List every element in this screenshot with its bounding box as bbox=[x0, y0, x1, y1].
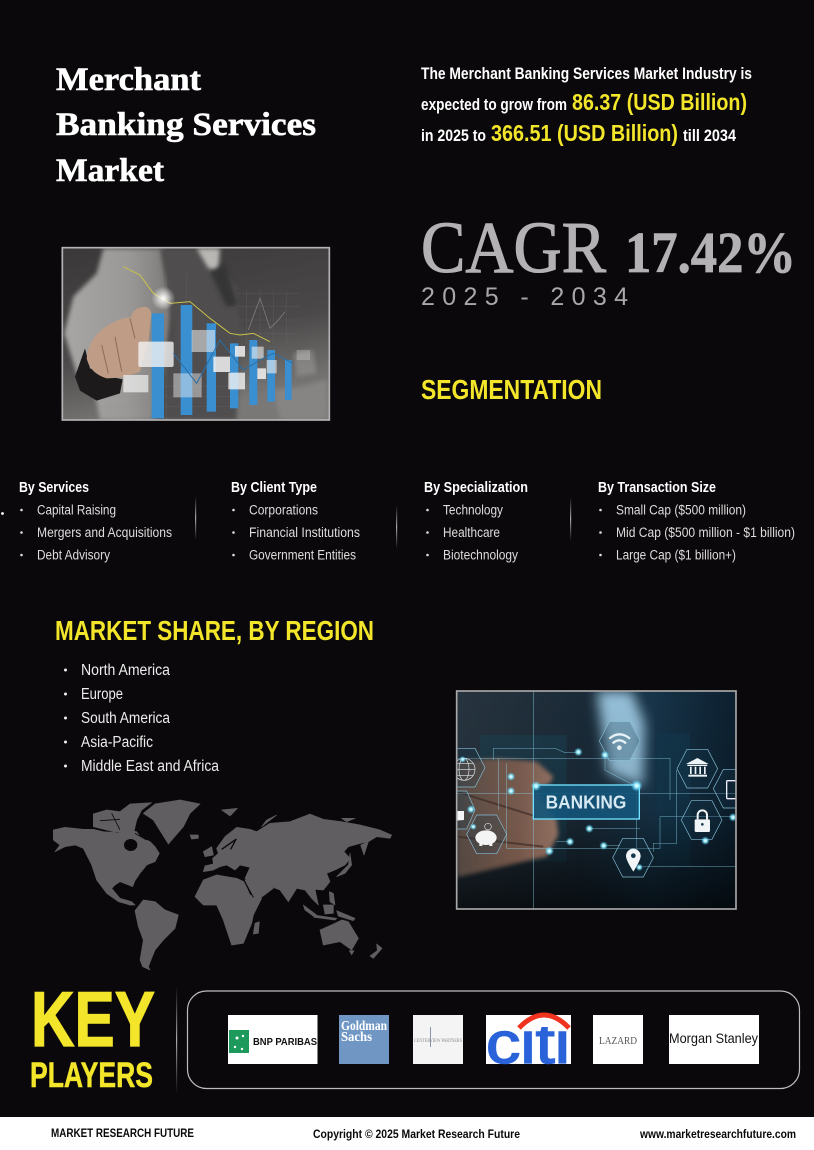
title: Market bbox=[56, 153, 164, 189]
segment: by specialization: Biotechnology bbox=[443, 548, 518, 562]
market growth statement: 366.51 (USD Billion) bbox=[491, 120, 678, 146]
logo: Lazard: LAZARD bbox=[599, 1036, 637, 1047]
region list: Europe bbox=[81, 686, 123, 703]
segment: by services bbox=[19, 479, 172, 562]
region list: South America bbox=[81, 710, 170, 727]
segment: by services: Debt Advisory bbox=[37, 548, 110, 562]
logo: BNP Paribas: BNP PARIBAS bbox=[253, 1036, 317, 1048]
heading: key players: KEY bbox=[31, 975, 155, 1063]
region list: Asia-Pacific bbox=[81, 734, 153, 751]
CAGR figure: CAGR bbox=[421, 207, 606, 288]
segment: by services: By Services bbox=[19, 479, 89, 496]
segment: by transaction size bbox=[598, 479, 795, 562]
footer bbox=[0, 1117, 814, 1150]
hand bbox=[457, 758, 558, 877]
market growth statement: in 2025 to bbox=[421, 127, 486, 145]
CAGR figure: 17.42% bbox=[625, 220, 796, 285]
hand bbox=[87, 307, 151, 378]
grid bbox=[164, 274, 300, 419]
logo: BNP Paribas bbox=[228, 1015, 318, 1064]
panel: key player logos bbox=[188, 991, 800, 1088]
photo: banking technology: BANKING bbox=[546, 792, 626, 813]
heading: market share by region: MARKET SHARE, BY REGION bbox=[55, 615, 374, 646]
logo: Centerview Partners: CENTERVIEW PARTNERS bbox=[414, 1039, 462, 1044]
segment: by transaction size: Small Cap ($500 million) bbox=[616, 502, 746, 518]
icon: wifi bbox=[609, 734, 630, 743]
region list: North America bbox=[81, 662, 170, 679]
icon: piggy bank bbox=[475, 830, 497, 845]
title bbox=[56, 62, 316, 189]
title: Banking Services bbox=[56, 107, 316, 143]
logo: Goldman Sachs: Goldman bbox=[341, 1019, 387, 1034]
market growth statement: expected to grow from bbox=[421, 96, 567, 114]
photo: banking technology bbox=[453, 691, 738, 909]
hexagons bbox=[457, 722, 736, 877]
icon: globe bbox=[458, 758, 476, 781]
region list bbox=[64, 662, 219, 775]
footer: Copyright © 2025 Market Research Future bbox=[313, 1127, 520, 1141]
logo: Goldman Sachs: Sachs bbox=[341, 1030, 372, 1045]
bars bbox=[152, 305, 292, 418]
segment: by client type: Government Entities bbox=[249, 548, 356, 562]
segment: by transaction size: Mid Cap ($500 million - $1 billion) bbox=[616, 525, 795, 540]
segment: by client type: Financial Institutions bbox=[249, 525, 360, 540]
panels bbox=[123, 330, 310, 397]
world map faint bbox=[275, 382, 328, 419]
market growth statement: till 2034 bbox=[683, 127, 737, 145]
icon: tablet bbox=[727, 781, 738, 799]
segment: by services: Capital Raising bbox=[37, 502, 116, 518]
logo: Lazard bbox=[593, 1015, 643, 1064]
heading: key players bbox=[30, 975, 155, 1095]
segment: by client type: By Client Type bbox=[231, 479, 317, 496]
icon: padlock bbox=[695, 819, 710, 832]
segment: by client type bbox=[231, 479, 360, 562]
heading: segmentation: SEGMENTATION bbox=[421, 374, 602, 405]
suit front bbox=[153, 248, 240, 420]
region list: Middle East and Africa bbox=[81, 758, 219, 775]
icon: bank bbox=[686, 758, 709, 777]
cuff bbox=[75, 348, 123, 401]
logo: Citi: citi bbox=[486, 1011, 570, 1076]
sleeve bbox=[64, 248, 173, 420]
logo: Centerview Partners bbox=[413, 1015, 463, 1064]
world map bbox=[53, 800, 392, 970]
market growth statement bbox=[421, 65, 752, 146]
segment: by specialization: By Specialization bbox=[424, 479, 528, 496]
segment: by client type: Corporations bbox=[249, 502, 318, 518]
market growth statement: The Merchant Banking Services Market Industry is bbox=[421, 65, 752, 83]
logo: Goldman Sachs bbox=[339, 1015, 389, 1064]
segment: by specialization: Technology bbox=[443, 502, 503, 518]
segment: by transaction size: By Transaction Size bbox=[598, 479, 716, 496]
segment: by transaction size: Large Cap ($1 billion+) bbox=[616, 548, 736, 562]
icon: map pin bbox=[626, 849, 641, 872]
segment: by specialization: Healthcare bbox=[443, 525, 500, 540]
segment: by specialization bbox=[424, 479, 528, 562]
segment: by services: Mergers and Acquisitions bbox=[37, 525, 172, 540]
logo: Morgan Stanley: Morgan Stanley bbox=[669, 1030, 758, 1046]
logo: Morgan Stanley bbox=[669, 1015, 759, 1064]
stray bullet bbox=[1, 512, 4, 515]
footer: MARKET RESEARCH FUTURE bbox=[51, 1126, 194, 1140]
CAGR figure: 2025 - 2034 bbox=[421, 283, 628, 311]
line bbox=[123, 267, 270, 342]
photo: businessman touching chart bbox=[62, 248, 329, 420]
circuit lines bbox=[457, 691, 736, 909]
market growth statement: 86.37 (USD Billion) bbox=[572, 89, 747, 115]
light dots bbox=[459, 748, 737, 871]
title: Merchant bbox=[56, 62, 201, 98]
banking button bbox=[533, 785, 639, 819]
heading: key players: PLAYERS bbox=[30, 1056, 153, 1095]
CAGR figure bbox=[421, 207, 796, 311]
